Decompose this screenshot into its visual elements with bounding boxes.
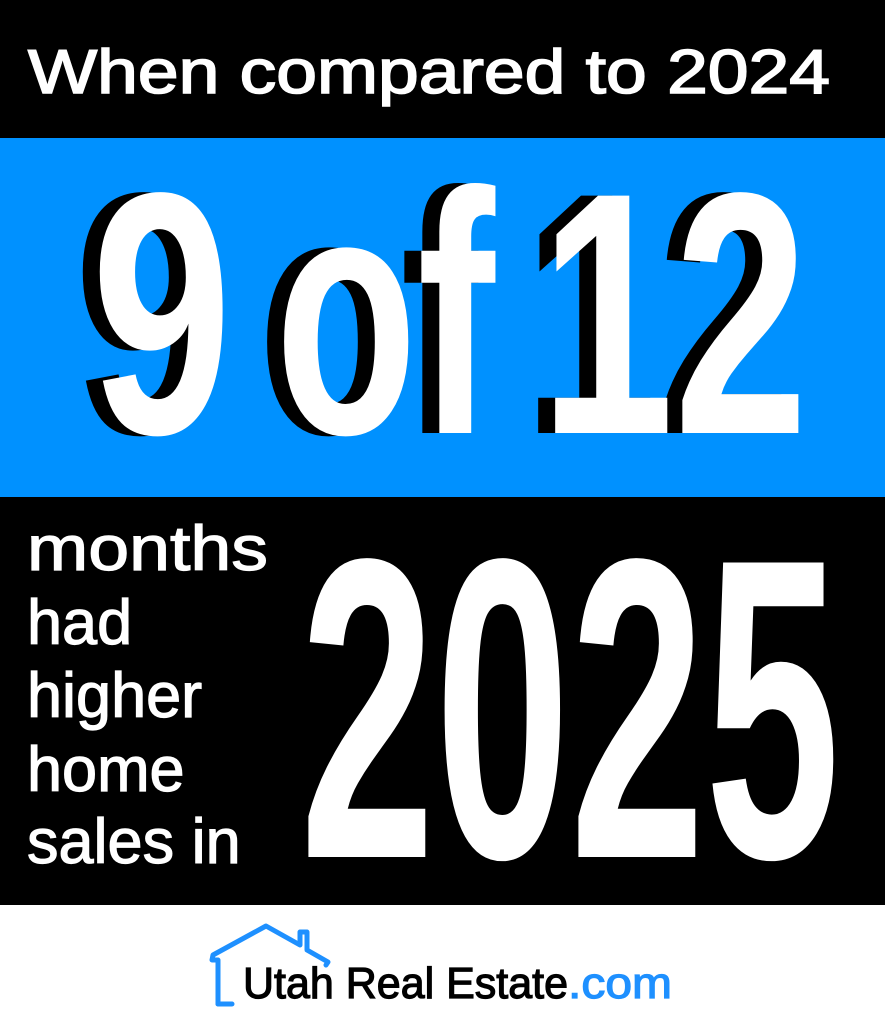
stat: 9 of 12: of [275, 122, 497, 507]
text block: months had higher home sales in: higher [27, 661, 202, 731]
logo: .com [568, 959, 672, 1008]
title: When compared to 2024 [28, 38, 830, 107]
icon: house outline [212, 926, 328, 1004]
stat: 9 of 12 shadow: of [258, 122, 480, 507]
text block: months had higher home sales in: sales in [27, 807, 241, 877]
text block: months had higher home sales in: months [27, 514, 268, 584]
band: top black [0, 0, 885, 138]
logo text: Utah Real Estate [243, 959, 568, 1008]
stat: 9 of 12 shadow: 9 [74, 122, 215, 507]
stat: 9 of 12 [91, 122, 808, 507]
text block: months had higher home sales in [27, 514, 268, 877]
panel: black lower [0, 470, 885, 948]
logo [212, 926, 672, 1008]
text block: months had higher home sales in: home [27, 735, 185, 805]
panel: blue stat [0, 122, 885, 507]
text block: months had higher home sales in: had [27, 588, 132, 658]
stat: 9 of 12: 9 [91, 122, 232, 507]
stat: 9 of 12 shadow [74, 122, 791, 507]
